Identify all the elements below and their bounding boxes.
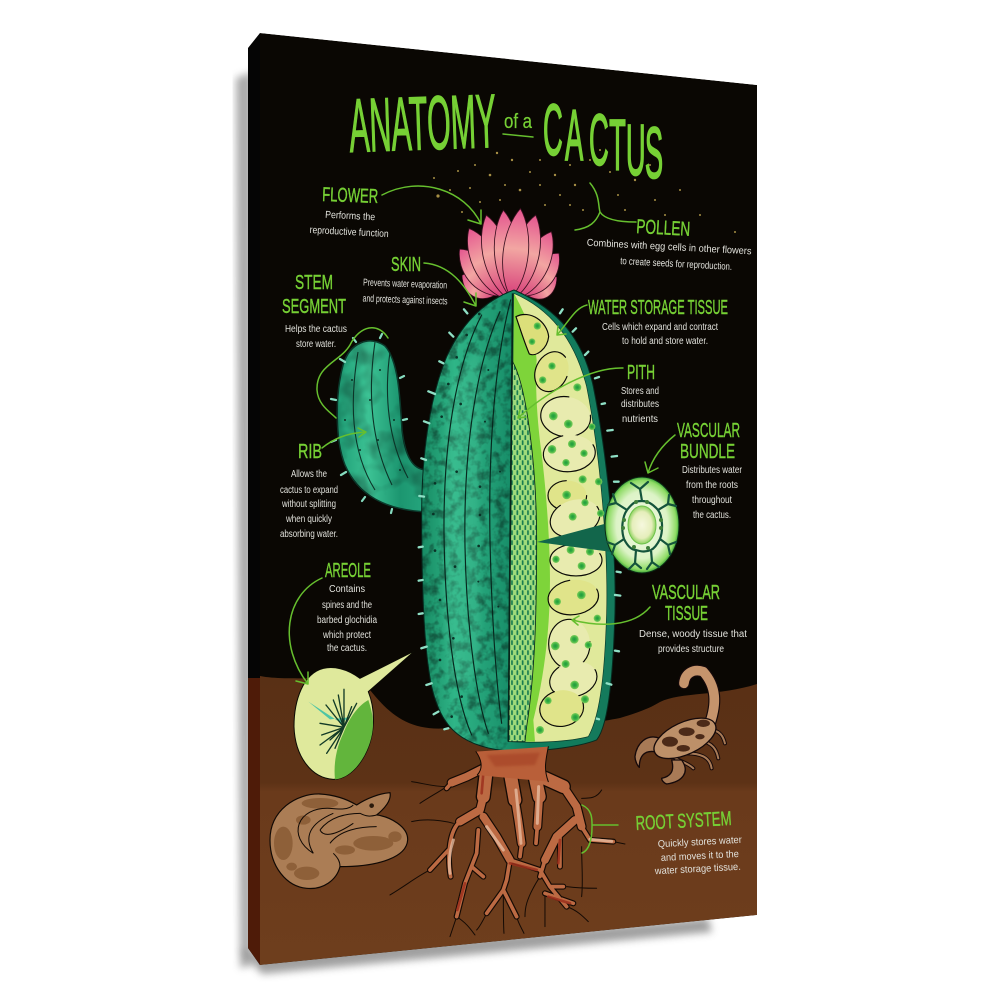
label: vascular tissue: Dense, woody tissue that <box>639 629 747 640</box>
areole detail <box>294 651 415 779</box>
label: areole: spines and the <box>322 600 372 611</box>
cactus stem segment (arm) <box>331 334 427 513</box>
label: rib: without splitting <box>281 499 336 510</box>
label: flower <box>309 184 389 240</box>
flower <box>450 207 569 306</box>
label: areole: barbed glochidia <box>317 615 377 626</box>
label: root system: water storage tissue. <box>654 862 741 877</box>
label: areole: the cactus. <box>327 643 367 654</box>
label: pollen: to create seeds for reproduction. <box>620 256 732 273</box>
drop shadow of the canvas <box>236 72 712 974</box>
root crown <box>476 747 548 782</box>
root highlights <box>449 787 612 873</box>
skin mottling <box>422 290 514 751</box>
arrow: flower <box>382 186 481 224</box>
label: root system <box>635 808 743 877</box>
storage cells <box>516 314 605 730</box>
pith <box>509 362 537 742</box>
label: vascular tissue: provides structure <box>658 644 724 655</box>
bracket: stem segment <box>317 328 388 418</box>
label: areole: which protect <box>322 630 371 641</box>
arrow: skin <box>424 263 476 306</box>
label: stem segment <box>282 272 347 350</box>
label: vascular bundle: throughout <box>692 495 732 506</box>
scorpion <box>635 671 725 784</box>
fine rootlets <box>390 782 625 937</box>
label: pith: nutrients <box>622 414 658 425</box>
label: pith: distributes <box>621 399 659 410</box>
arrow: vascular tissue <box>572 607 650 625</box>
soil <box>260 676 757 965</box>
label: stem segment: store water. <box>296 339 336 350</box>
label: water storage tissue: Cells which expand and contract <box>602 322 718 333</box>
scorpion claws <box>635 737 685 784</box>
label: vascular bundle <box>677 420 743 521</box>
cactus main body cross-section (drawn in zoom coordinates) <box>419 290 621 751</box>
label: flower: reproductive function <box>309 225 389 240</box>
label: skin: and protects against insects <box>362 294 448 307</box>
label: water storage tissue <box>588 297 728 347</box>
canvas side edge <box>248 33 260 965</box>
poster canvas <box>260 33 757 965</box>
label: rib: Allows the <box>291 469 327 480</box>
label: rib: cactus to expand <box>280 485 338 496</box>
bracket: root system <box>582 805 618 853</box>
label: rib: when quickly <box>285 514 332 525</box>
label: pith: Stores and <box>621 386 659 397</box>
label: vascular bundle: from the roots <box>686 480 738 491</box>
label: pollen: Combines with egg cells in other flowers <box>586 238 752 257</box>
cell nuclei <box>529 322 604 734</box>
label: water storage tissue: to hold and store water. <box>622 336 708 347</box>
bright green inner band <box>509 293 550 742</box>
title <box>348 79 663 194</box>
label: vascular tissue: VASCULAR <box>652 582 720 604</box>
label: pith <box>621 362 659 425</box>
vascular bundle detail <box>605 477 679 573</box>
scorpion body <box>648 710 722 767</box>
pollen dots <box>433 149 736 233</box>
label: pollen: POLLEN <box>636 216 691 241</box>
bracket: pollen <box>575 183 636 230</box>
root flesh <box>430 767 613 917</box>
spines <box>419 309 621 729</box>
label: pith: PITH <box>627 362 655 384</box>
root outlines <box>430 767 613 917</box>
label: areole <box>317 560 377 654</box>
label: root system: Quickly stores water <box>658 835 743 850</box>
title: ANATOMY <box>348 79 498 169</box>
arrow: pith <box>518 368 623 418</box>
label: stem segment: STEM <box>295 272 333 294</box>
label: vascular bundle: Distributes water <box>682 465 743 476</box>
label: vascular bundle: VASCULAR <box>677 420 740 442</box>
pale water storage tissue <box>509 293 607 742</box>
areoles <box>432 313 501 718</box>
label: skin <box>362 254 448 307</box>
label: flower: FLOWER <box>322 184 379 208</box>
arrow: rib <box>322 428 366 448</box>
connector wedge to vascular bundle <box>537 523 612 552</box>
title: CACTUS <box>543 90 663 194</box>
label: stem segment: SEGMENT <box>282 296 346 318</box>
label: pollen <box>586 216 752 273</box>
label: vascular tissue <box>639 582 747 655</box>
arrow: areole <box>289 578 322 684</box>
arrow: water storage <box>557 305 587 335</box>
label: skin: Prevents water evaporation <box>363 278 447 291</box>
label: root system: and moves it to the <box>661 849 740 864</box>
label: stem segment: Helps the cactus <box>285 324 347 335</box>
ribs <box>444 300 511 735</box>
label: root system: ROOT SYSTEM <box>635 808 732 835</box>
title: of a <box>504 111 533 133</box>
label: rib: absorbing water. <box>280 529 338 540</box>
snake <box>270 793 408 888</box>
cactus skin <box>422 290 615 751</box>
label: vascular bundle: the cactus. <box>693 510 731 521</box>
label: water storage tissue: WATER STORAGE TISSUE <box>588 297 728 319</box>
label: flower: Performs the <box>325 210 376 223</box>
label: areole: AREOLE <box>325 560 371 582</box>
label: areole: Contains <box>329 584 365 595</box>
label: rib: RIB <box>298 441 322 463</box>
label: skin: SKIN <box>391 254 421 276</box>
label: vascular bundle: BUNDLE <box>680 441 735 463</box>
arrow: vascular bundle <box>645 435 675 473</box>
roots <box>390 747 625 937</box>
label: rib <box>280 441 338 540</box>
label: vascular tissue: TISSUE <box>665 603 708 625</box>
skin highlights <box>443 347 481 686</box>
